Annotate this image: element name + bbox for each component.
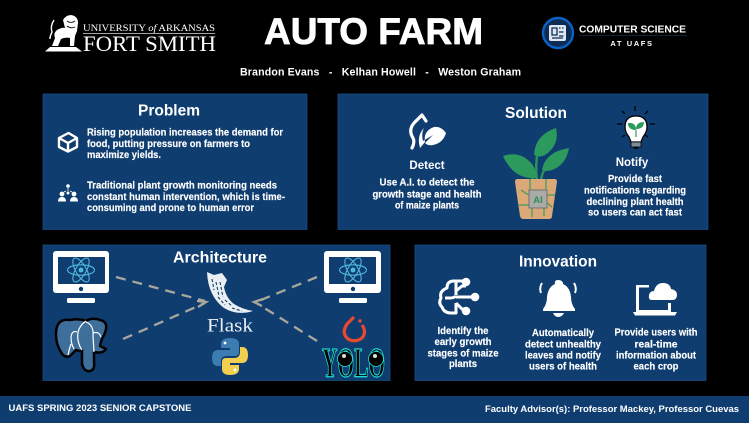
- wordmark sub line: AT UAFS: [610, 39, 654, 48]
- text: notify description: so users can act fast: [588, 208, 683, 218]
- capstone label: UAFS SPRING 2023 SENIOR CAPSTONE: [8, 402, 192, 413]
- heading: architecture: Architecture: [173, 250, 267, 266]
- icon: leaf: [411, 115, 446, 148]
- text: detect description: of maize plants: [395, 200, 459, 212]
- text: rising population: food, putting pressure on farmers to: [87, 139, 250, 150]
- icon: Flask horn: [207, 272, 253, 313]
- icon: laptop with cloud: [633, 283, 677, 316]
- text: detect description: Use A.I. to detect the: [380, 178, 475, 188]
- text: notify description: notifications regarding: [584, 186, 686, 196]
- icon: left monitor with React: [53, 251, 109, 303]
- panel: problem: [43, 94, 307, 230]
- text: identify stages: [428, 326, 499, 370]
- arrow: database to flask: [123, 303, 205, 339]
- text: notify description: [584, 174, 686, 218]
- text: real-time information: real-time: [634, 340, 678, 350]
- label: notify: Notify: [616, 157, 649, 169]
- text: rising population: [87, 128, 283, 161]
- logo: YOLO: [322, 341, 385, 387]
- icon: plant in pot with AI chip: [503, 128, 569, 219]
- arrow: frontend to flask: [116, 277, 206, 307]
- text: detect unhealthy: Automatically: [532, 328, 594, 339]
- team names: Brandon Evans - Kelhan Howell - Weston Graham: [240, 66, 521, 78]
- icon: PostgreSQL elephant: [56, 319, 106, 371]
- chip label: AI: [533, 195, 543, 206]
- text: detect unhealthy: [525, 328, 601, 372]
- label: detect: Detect: [409, 160, 445, 172]
- text: rising population: Rising population increases the demand for: [87, 128, 283, 138]
- faculty advisors: Faculty Advisor(s): Professor Mackey, Professor Cuevas: [485, 403, 739, 414]
- icon: right monitor with React: [324, 251, 381, 303]
- text: detect unhealthy: leaves and notify: [525, 350, 601, 362]
- icon: light bulb with sprout: [617, 106, 655, 149]
- icon: cube: [59, 133, 77, 152]
- text: real-time information: each crop: [634, 362, 678, 372]
- text: real-time information: [614, 328, 698, 372]
- text: traditional monitoring: Traditional plant growth monitoring needs: [87, 180, 277, 192]
- header: [45, 11, 687, 78]
- text: notify description: declining plant health: [586, 197, 684, 208]
- icon: circuit book: [543, 18, 573, 48]
- icon: people: [58, 184, 78, 202]
- logo: YOLO: YOLO: [322, 341, 385, 387]
- icon: PyTorch: [344, 317, 364, 341]
- text: detect description: growth stage and health: [372, 190, 482, 200]
- text: identify stages: plants: [449, 359, 477, 370]
- wordmark: COMPUTER SCIENCE: [579, 24, 686, 36]
- panel: innovation: [415, 245, 706, 380]
- heading: problem: Problem: [138, 102, 200, 120]
- text: identify stages: Identify the: [438, 326, 489, 337]
- text: real-time information: information about: [616, 350, 697, 362]
- text: traditional monitoring: [87, 180, 285, 214]
- footer band: [0, 396, 749, 423]
- text: detect unhealthy: detect unhealthy: [525, 340, 601, 350]
- heading: innovation: Innovation: [519, 254, 597, 270]
- text: identify stages: stages of maize: [428, 348, 499, 360]
- text: real-time information: Provide users with: [614, 328, 698, 338]
- text: notify description: Provide fast: [608, 174, 663, 185]
- text: detect description: [372, 178, 482, 212]
- icon: bell: [540, 280, 576, 317]
- icon: lion: [45, 15, 82, 52]
- logo: Computer Science at UAFS: [543, 18, 687, 48]
- title: AUTO FARM: [264, 11, 483, 52]
- icon: Python: [212, 338, 248, 375]
- text: identify stages: early growth: [434, 337, 492, 348]
- text: detect unhealthy: users of health: [529, 362, 597, 372]
- arrow: frontend right to flask: [254, 277, 317, 306]
- icon: brain circuit: [440, 279, 478, 314]
- panel: architecture: [43, 245, 390, 387]
- text: traditional monitoring: constant human intervention, which is time-: [87, 192, 285, 203]
- text: rising population: maximize yields.: [87, 150, 161, 161]
- logo: University of Arkansas Fort Smith: [45, 15, 216, 56]
- wordmark bottom: FORT SMITH: [83, 31, 216, 56]
- wordmark top: UNIVERSITY of ARKANSAS: [83, 23, 215, 34]
- label: Flask: Flask: [207, 316, 254, 336]
- text: traditional monitoring: consuming and prone to human error: [87, 203, 254, 214]
- panel: solution: [338, 94, 708, 230]
- arrow: model to flask: [258, 304, 317, 341]
- heading: solution: Solution: [505, 105, 567, 122]
